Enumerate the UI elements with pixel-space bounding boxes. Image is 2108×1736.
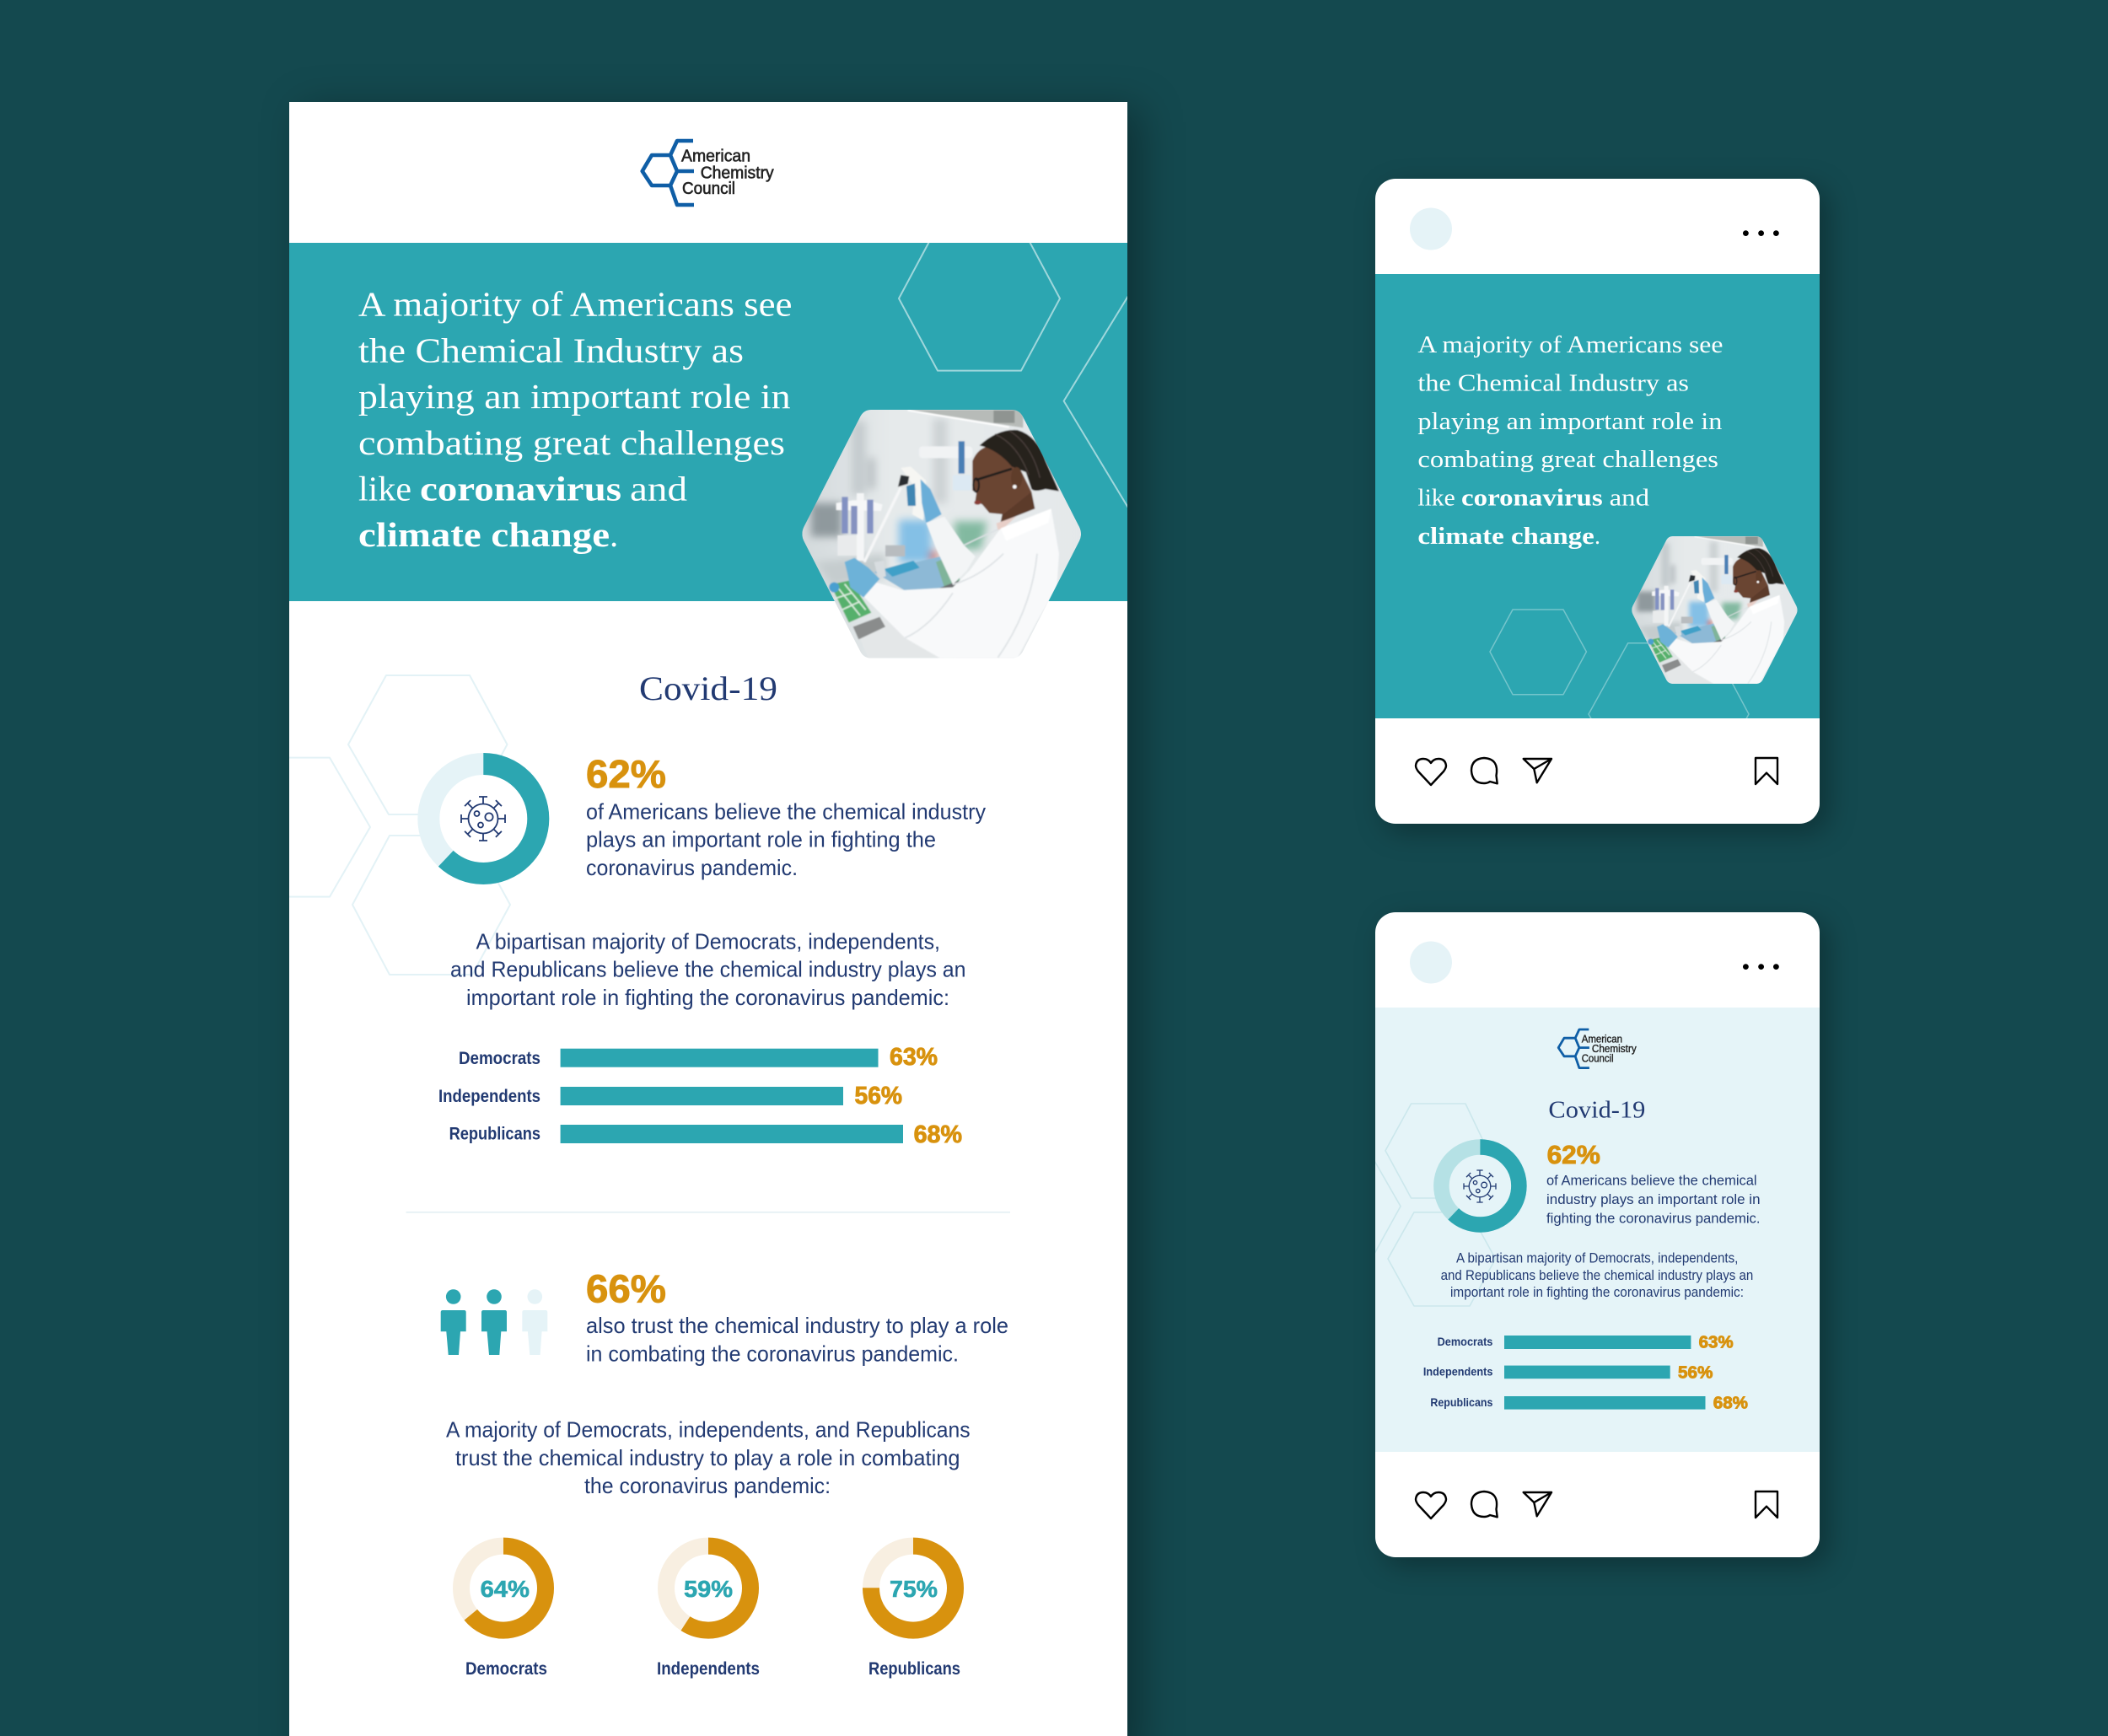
- bar chart: party support: 63%: [1699, 1334, 1734, 1352]
- donut chart: Democrats 64%: [461, 1546, 547, 1679]
- headline: combating great challenges: [358, 423, 785, 462]
- stat: 62%: industry plays an important role in: [1546, 1192, 1761, 1207]
- bar chart: party support: [438, 1044, 962, 1148]
- logo: American Chemistry Council: Chemistry: [701, 164, 774, 183]
- donut chart: 62%: [428, 764, 538, 873]
- icon: virus: [1464, 1170, 1496, 1202]
- stat: 66%: [586, 1266, 1008, 1367]
- heading: Covid-19: Covid-19: [639, 669, 777, 707]
- donut chart: 62%: [1441, 1147, 1519, 1224]
- headline: and: [1610, 486, 1649, 511]
- bar chart: party support: Democrats: [1438, 1335, 1493, 1348]
- bar chart: party support: [1423, 1334, 1748, 1413]
- headline: climate change: [1417, 524, 1594, 550]
- stat: 62%: coronavirus pandemic.: [586, 855, 798, 880]
- text: bipartisan majority: and Republicans believe the chemical industry plays an: [1441, 1268, 1753, 1283]
- text: majority trust: the coronavirus pandemic:: [584, 1473, 831, 1498]
- headline: coronavirus: [1461, 486, 1603, 511]
- stat: 62%: of Americans believe the chemical industry: [586, 798, 986, 824]
- logo: American Chemistry Council: American: [681, 147, 750, 166]
- bar chart: party support: 68%: [1713, 1395, 1748, 1413]
- hexagon outlines: [1375, 1103, 1496, 1307]
- post image area: [1375, 274, 1820, 718]
- logo: American Chemistry Council: [1558, 1029, 1637, 1068]
- stat: 62%: [1546, 1140, 1761, 1226]
- stat: 66%: also trust the chemical industry to play a role: [586, 1313, 1008, 1338]
- hexagon outlines behind donut: [289, 675, 511, 975]
- headline: coronavirus: [420, 469, 621, 508]
- donut chart: Independents 59%: [657, 1546, 760, 1679]
- headline: [358, 285, 793, 554]
- text: bipartisan majority: [450, 928, 966, 1010]
- bar chart: party support: Republicans: [1430, 1395, 1493, 1409]
- stat: 62%: [586, 752, 986, 880]
- photo: scientist: [1621, 528, 1806, 689]
- heading: Covid-19: Covid-19: [1548, 1097, 1645, 1123]
- logo: American Chemistry Council: Chemistry: [1592, 1043, 1637, 1055]
- panel: social post 2: [1349, 912, 1820, 1557]
- text: bipartisan majority: [1441, 1251, 1753, 1300]
- bar chart: party support: Democrats: [459, 1049, 540, 1068]
- headline: playing an important role in: [1417, 409, 1722, 435]
- panel: social post 1: [1375, 179, 1820, 824]
- post image area: [1349, 1008, 1820, 1452]
- infographic canvas: [289, 99, 1834, 1736]
- icon: more menu: [1743, 230, 1779, 236]
- icon row: like, comment, share, save: [1416, 758, 1777, 785]
- text: bipartisan majority: important role in fighting the coronavirus pandemic:: [466, 985, 949, 1010]
- icon: virus: [461, 797, 505, 841]
- text: majority trust: [446, 1416, 971, 1498]
- stat: 66%: in combating the coronavirus pandemic.: [586, 1341, 959, 1367]
- stat: 62%: 62%: [1547, 1140, 1600, 1169]
- headline: the Chemical Industry as: [1417, 371, 1689, 396]
- donut chart: Democrats 64%: Democrats: [465, 1659, 547, 1679]
- donut chart: Republicans 75%: Republicans: [868, 1659, 960, 1679]
- stat: 62%: plays an important role in fighting the: [586, 827, 936, 852]
- hero banner: [289, 243, 1127, 601]
- text: bipartisan majority: A bipartisan majority of Democrats, independents,: [1456, 1251, 1738, 1266]
- logo: American Chemistry Council: Council: [1582, 1052, 1614, 1064]
- headline: playing an important role in: [358, 377, 791, 416]
- donut chart: Independents 59%: Independents: [657, 1659, 760, 1679]
- text: bipartisan majority: A bipartisan majority of Democrats, independents,: [476, 928, 940, 954]
- headline: like: [1417, 486, 1455, 511]
- logo: American Chemistry Council: Council: [682, 179, 735, 198]
- icon: people 2 of 3: [441, 1289, 547, 1355]
- bar chart: party support: 68%: [914, 1121, 962, 1148]
- hexagon outlines in banner: [898, 243, 1127, 508]
- headline: and: [630, 469, 687, 508]
- donut chart: Republicans 75%: [868, 1546, 960, 1679]
- text: majority trust: trust the chemical industry to play a role in combating: [455, 1445, 960, 1470]
- bar chart: party support: 56%: [855, 1083, 902, 1110]
- stat: 62%: fighting the coronavirus pandemic.: [1546, 1211, 1761, 1226]
- photo: scientist in hexagon: [784, 396, 1096, 666]
- logo: American Chemistry Council: American: [1582, 1034, 1622, 1045]
- headline: [1417, 332, 1723, 550]
- hexagon outlines: [1489, 609, 1750, 718]
- bar chart: party support: 63%: [890, 1044, 938, 1071]
- headline: .: [1594, 524, 1600, 550]
- stat: 66%: 66%: [586, 1266, 666, 1310]
- headline: A majority of Americans see: [1417, 332, 1723, 358]
- text: majority trust: A majority of Democrats, independents, and Republicans: [446, 1416, 971, 1442]
- panel: main infographic: [253, 102, 1180, 1736]
- headline: like: [358, 469, 411, 508]
- headline: A majority of Americans see: [358, 285, 793, 324]
- icon: more menu: [1743, 964, 1779, 970]
- bar chart: party support: Independents: [1423, 1365, 1493, 1379]
- headline: .: [610, 515, 618, 554]
- text: bipartisan majority: and Republicans believe the chemical industry plays an: [450, 957, 966, 982]
- stat: 62%: of Americans believe the chemical: [1546, 1174, 1757, 1189]
- bar chart: party support: Independents: [438, 1087, 540, 1106]
- bar chart: party support: Republicans: [449, 1125, 540, 1143]
- bar chart: party support: 56%: [1678, 1364, 1713, 1383]
- text: bipartisan majority: important role in fighting the coronavirus pandemic:: [1450, 1285, 1744, 1300]
- headline: climate change: [358, 515, 610, 554]
- donut chart: Democrats 64%: 64%: [481, 1576, 530, 1602]
- donut chart: Independents 59%: 59%: [684, 1576, 733, 1602]
- headline: combating great challenges: [1417, 447, 1718, 473]
- logo: American Chemistry Council: [643, 141, 774, 205]
- headline: the Chemical Industry as: [358, 331, 744, 370]
- stat: 62%: 62%: [586, 752, 666, 796]
- avatar: [1410, 207, 1452, 250]
- avatar: [1410, 941, 1452, 983]
- donut chart: Republicans 75%: 75%: [890, 1576, 938, 1602]
- icon row: like, comment, share, save: [1416, 1491, 1777, 1518]
